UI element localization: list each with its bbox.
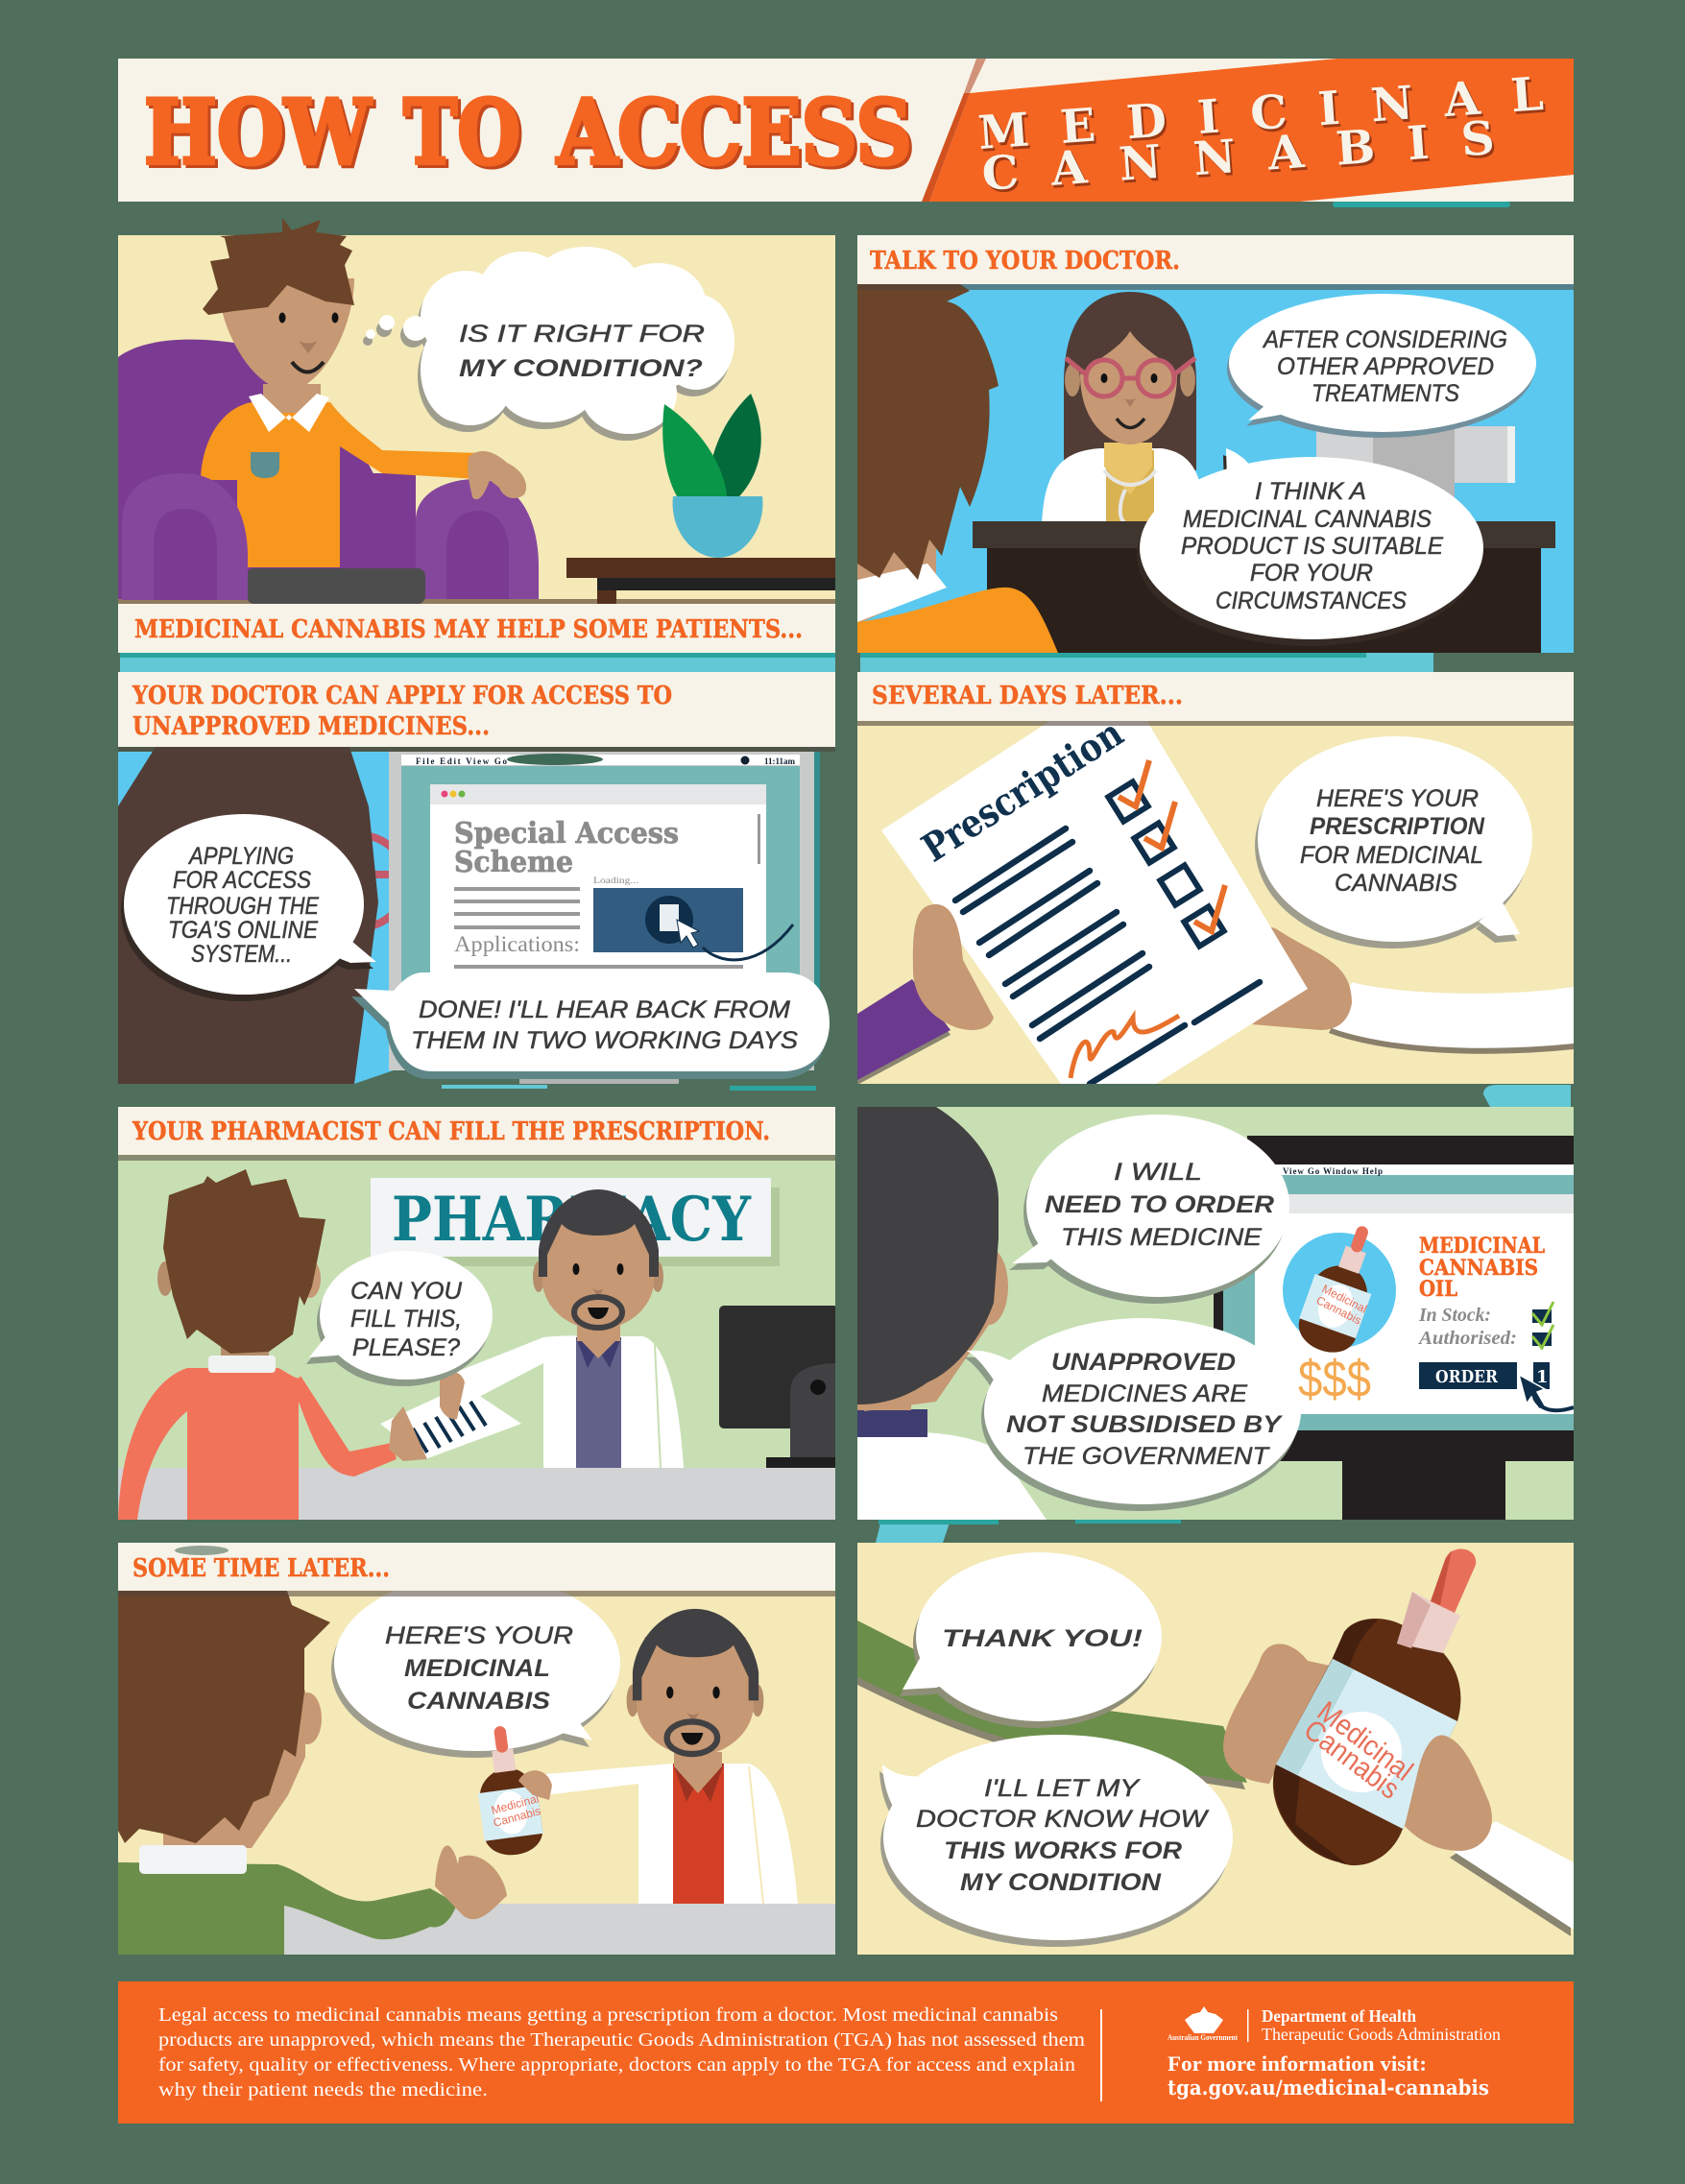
prescription handed over [380, 1371, 521, 1459]
more information: For more information visit: [1167, 2052, 1427, 2076]
more information [1167, 2052, 1489, 2100]
speech text: suitable product: I THINK A [1255, 478, 1366, 505]
bottle label text [1314, 1282, 1369, 1328]
caption text: YOUR PHARMACIST CAN FILL THE PRESCRIPTION. [132, 1117, 770, 1146]
caption bar [118, 672, 838, 747]
footer body text: Legal access to medicinal cannabis means getting a prescription from a doctor. Most medicinal cannabis [158, 2004, 1058, 2026]
ribbon text: cannabis: CANNABIS [982, 114, 1499, 204]
thought text [459, 324, 705, 376]
speech text: need to order [1045, 1159, 1274, 1251]
caption text: UNAPPROVED MEDICINES... [132, 712, 490, 741]
upload box [593, 888, 743, 952]
orange ribbon [929, 59, 1574, 202]
monitor: Scheme [454, 846, 573, 879]
panel 5: pharmacist receives prescription [118, 1107, 838, 1520]
armchair back and right arm [118, 340, 539, 600]
speech text: suitable product: CIRCUMSTANCES [1216, 588, 1407, 614]
speech text: let my doctor know [916, 1775, 1210, 1896]
orange ticks [1119, 760, 1225, 931]
doctor hair from behind [118, 747, 378, 1084]
footer banner [118, 1981, 1574, 2124]
panel 6: order online [857, 1107, 1574, 1520]
speech bubble: can you fill [309, 1251, 493, 1380]
speech text: can you fill [350, 1278, 463, 1361]
caption shadow [857, 284, 1574, 290]
speech text: can you fill: FILL THIS, [350, 1306, 462, 1332]
speech bubble: not subsidised [967, 1318, 1301, 1504]
stock status: Authorised: [1417, 1328, 1517, 1349]
stock status: In Stock: [1418, 1305, 1491, 1326]
speech text: let my doctor know: MY CONDITION [960, 1869, 1162, 1896]
caption text [132, 685, 672, 735]
white sleeve [1329, 982, 1574, 1048]
speech text: done [413, 1000, 798, 1048]
caption bar [118, 604, 838, 653]
glasses [1066, 358, 1195, 396]
panel 7: pharmacist hands over bottle [118, 1543, 838, 1955]
speech text: done: DONE! I'LL HEAR BACK FROM [419, 996, 790, 1023]
speech text: medicinal cannabis: HERE'S YOUR [385, 1622, 573, 1649]
more information: tga.gov.au/medicinal-cannabis [1167, 2076, 1489, 2100]
panel 1: patient in armchair [118, 218, 838, 653]
speech bubble: let my doctor know [882, 1735, 1233, 1940]
product title: MEDICINAL [1419, 1234, 1545, 1259]
pharmacist head [533, 1189, 663, 1330]
caption text: MEDICINAL CANNABIS MAY HELP SOME PATIENTS... [134, 615, 803, 644]
speech text: applying: SYSTEM... [191, 941, 292, 968]
caption text: YOUR DOCTOR CAN APPLY FOR ACCESS TO [132, 682, 672, 710]
desk [973, 521, 1555, 653]
title: how to access: HOW [144, 80, 372, 184]
panel 2: talk to your doctor [857, 235, 1574, 653]
caption shadow [118, 747, 838, 752]
title: how to access: ACCESS [556, 80, 912, 184]
product title: OIL [1419, 1277, 1457, 1302]
order button: ORDER [1435, 1367, 1499, 1387]
speech text: suitable product: PRODUCT IS SUITABLE [1181, 533, 1443, 560]
speech text: applying: APPLYING [187, 843, 294, 870]
speech text: medicinal cannabis [385, 1622, 573, 1715]
monitor [389, 752, 820, 1070]
speech text: can you fill: CAN YOU [350, 1278, 463, 1305]
paper title: Prescription [914, 710, 1131, 871]
speech text: not subsidised: THE GOVERNMENT [1023, 1443, 1270, 1470]
speech bubble: thank you [903, 1552, 1162, 1721]
browser window [430, 804, 766, 972]
speech text: medicinal cannabis: MEDICINAL [404, 1655, 550, 1682]
large monitor [1214, 1136, 1574, 1520]
green sleeve [857, 1620, 1247, 1783]
white sleeve [1453, 1821, 1574, 1930]
speech text: applying: TGA'S ONLINE [168, 917, 318, 944]
monitor stand [519, 1079, 679, 1084]
monitor: Loading... [593, 876, 638, 885]
department name: Therapeutic Goods Administration [1262, 2025, 1501, 2044]
pot plant [662, 394, 762, 558]
ribbon text: medicinal: MEDICINAL [978, 70, 1548, 163]
thought text: MY CONDITION? [459, 355, 703, 382]
patient from behind [857, 284, 1058, 653]
paper lines [955, 828, 1260, 1084]
slanted divider stripe [964, 59, 986, 93]
small bottle [469, 1722, 545, 1859]
thought bubble [366, 247, 734, 434]
speech text: not subsidised: NOT SUBSIDISED BY [1006, 1411, 1284, 1438]
ribbon text: medicinal: MEDICINAL [976, 67, 1545, 160]
speech text: medicinal cannabis: CANNABIS [407, 1688, 550, 1715]
speech text: thank you: THANK YOU! [942, 1625, 1143, 1652]
caption text: SEVERAL DAYS LATER... [872, 682, 1183, 710]
pharmacist [449, 1189, 684, 1468]
prescription paper [881, 710, 1308, 1084]
coffee table [566, 558, 838, 604]
purple sleeve [857, 979, 951, 1080]
department name [1262, 2006, 1501, 2044]
caption shadow [118, 1155, 838, 1161]
title: how to access: HOW [147, 83, 374, 187]
patient from behind [118, 1169, 427, 1520]
left hand [913, 904, 994, 1030]
person from behind [857, 1107, 1047, 1520]
caption shadow [857, 721, 1574, 726]
speech bubble: here's your medicinal cannabis [334, 1574, 620, 1751]
patient from behind [118, 1591, 507, 1955]
pharmacist hand [518, 1770, 552, 1800]
speech text: prescription [1300, 785, 1485, 897]
government crest [1167, 2006, 1238, 2042]
caption bar [118, 1107, 838, 1155]
large bottle [1273, 1549, 1476, 1865]
speech text: need to order: I WILL [1114, 1159, 1202, 1186]
monitor back [1316, 426, 1515, 497]
red wall clock [371, 832, 389, 929]
caption shadow [118, 1591, 838, 1596]
title: how to access [144, 80, 915, 187]
speech bubble: applying [124, 814, 376, 995]
speech text: applying: THROUGH THE [166, 893, 319, 920]
speech text: after considering [1262, 330, 1507, 401]
speech text: prescription: HERE'S YOUR [1316, 785, 1479, 812]
pharmacy sign: PHARMACY [392, 1184, 752, 1256]
monitor: 11:11am [764, 756, 796, 766]
floor line [118, 599, 838, 604]
footer body text: products are unapproved, which means the Therapeutic Goods Administration (TGA) has not assessed them [158, 2029, 1085, 2051]
product image circle [1283, 1233, 1396, 1348]
speech text: applying: FOR ACCESS [173, 867, 311, 894]
caption bar [857, 672, 1574, 721]
counter [284, 1904, 838, 1955]
right hand [1405, 1735, 1492, 1851]
computer monitor [719, 1306, 838, 1468]
speech bubble: done [354, 972, 830, 1071]
title: how to access: ACCESS [559, 83, 915, 187]
bottle label text [490, 1791, 542, 1830]
speech bubble: suitable product [1140, 448, 1483, 639]
caption text: SOME TIME LATER... [132, 1554, 390, 1583]
doctor [1042, 292, 1204, 523]
dark ribbon edge [922, 93, 970, 202]
footer body text: for safety, quality or effectiveness. Where appropriate, doctors can apply to the TGA for access and explain [158, 2054, 1075, 2076]
speech text: need to order: THIS MEDICINE [1061, 1224, 1262, 1251]
department name: Department of Health [1262, 2006, 1416, 2026]
caption bar [118, 1543, 838, 1591]
speech text: done: THEM IN TWO WORKING DAYS [411, 1027, 798, 1054]
footer body text: why their patient needs the medicine. [158, 2079, 488, 2100]
government crest: Australian Government [1167, 2033, 1238, 2042]
price icons: $$$ [1298, 1351, 1371, 1408]
speech text: suitable product: FOR YOUR [1250, 560, 1373, 587]
speech text: let my doctor know: DOCTOR KNOW HOW [916, 1806, 1210, 1833]
ribbon text: cannabis: CANNABIS [980, 111, 1496, 202]
speech bubble: here's your prescription [1258, 736, 1532, 942]
speech text: let my doctor know: I'LL LET MY [984, 1775, 1142, 1802]
speech text: prescription: PRESCRIPTION [1310, 813, 1485, 840]
bottle label text: Cannabis [1298, 1714, 1405, 1806]
header banner [118, 59, 1574, 204]
product title: CANNABIS [1419, 1256, 1538, 1281]
speech bubble: need to order [1012, 1115, 1289, 1297]
left hand [1223, 1644, 1330, 1784]
speech text: let my doctor know: THIS WORKS FOR [944, 1837, 1182, 1864]
bottle label text: Medicinal [1320, 1282, 1369, 1316]
bottle label text: Medicinal [490, 1791, 541, 1817]
speech text: can you fill: PLEASE? [352, 1334, 460, 1361]
speech text: after considering: OTHER APPROVED [1277, 353, 1494, 380]
speech bubble: after considering [1229, 294, 1536, 432]
panel 3: online application [118, 672, 838, 1084]
footer body text [158, 2004, 1085, 2100]
title: how to access: TO [406, 83, 523, 187]
stock status [1417, 1302, 1553, 1349]
caption text: TALK TO YOUR DOCTOR. [870, 247, 1180, 276]
thought text: IS IT RIGHT FOR [459, 321, 705, 348]
monitor: Applications: [454, 932, 580, 956]
bottle label text: Cannabis [1314, 1293, 1363, 1328]
order button: 1 [1536, 1367, 1549, 1387]
speech text: not subsidised: MEDICINES ARE [1042, 1380, 1247, 1407]
speech text: need to order: NEED TO ORDER [1045, 1191, 1274, 1218]
scheme title: Special Access [454, 817, 679, 851]
pharmacist [545, 1609, 798, 1904]
bottle label text: Medicinal [1312, 1695, 1418, 1788]
pharmacist head [627, 1609, 763, 1756]
menu bar text: File Edit View Go [416, 756, 507, 766]
right hand behind paper [1248, 927, 1352, 1030]
small bottle [1291, 1216, 1392, 1360]
title: how to access: TO [403, 80, 520, 184]
speech text: suitable product: MEDICINAL CANNABIS [1183, 506, 1432, 533]
signature [1071, 1016, 1179, 1078]
counter [118, 1468, 838, 1520]
speech text: not subsidised: UNAPPROVED [1051, 1349, 1236, 1376]
speech text: after considering: AFTER CONSIDERING [1262, 326, 1507, 353]
bottle label text: Cannabis [492, 1804, 542, 1830]
speech text: after considering: TREATMENTS [1312, 380, 1459, 407]
armchair left arm [122, 473, 248, 600]
checkboxes [1108, 781, 1224, 947]
speech text: prescription: CANNABIS [1335, 870, 1457, 897]
order button [1419, 1362, 1574, 1410]
panel 8: thank you [857, 1543, 1574, 1955]
speech text: not subsidised [1006, 1349, 1284, 1470]
menu bar text: View Go Window Help [1283, 1166, 1383, 1176]
product title [1419, 1234, 1545, 1302]
speech text: suitable product [1181, 478, 1443, 614]
patient figure [201, 218, 526, 604]
speech text: applying [166, 843, 319, 968]
caption bar [857, 235, 1574, 284]
panel 4: prescription [857, 672, 1574, 1084]
speech text: prescription: FOR MEDICINAL [1300, 842, 1483, 869]
